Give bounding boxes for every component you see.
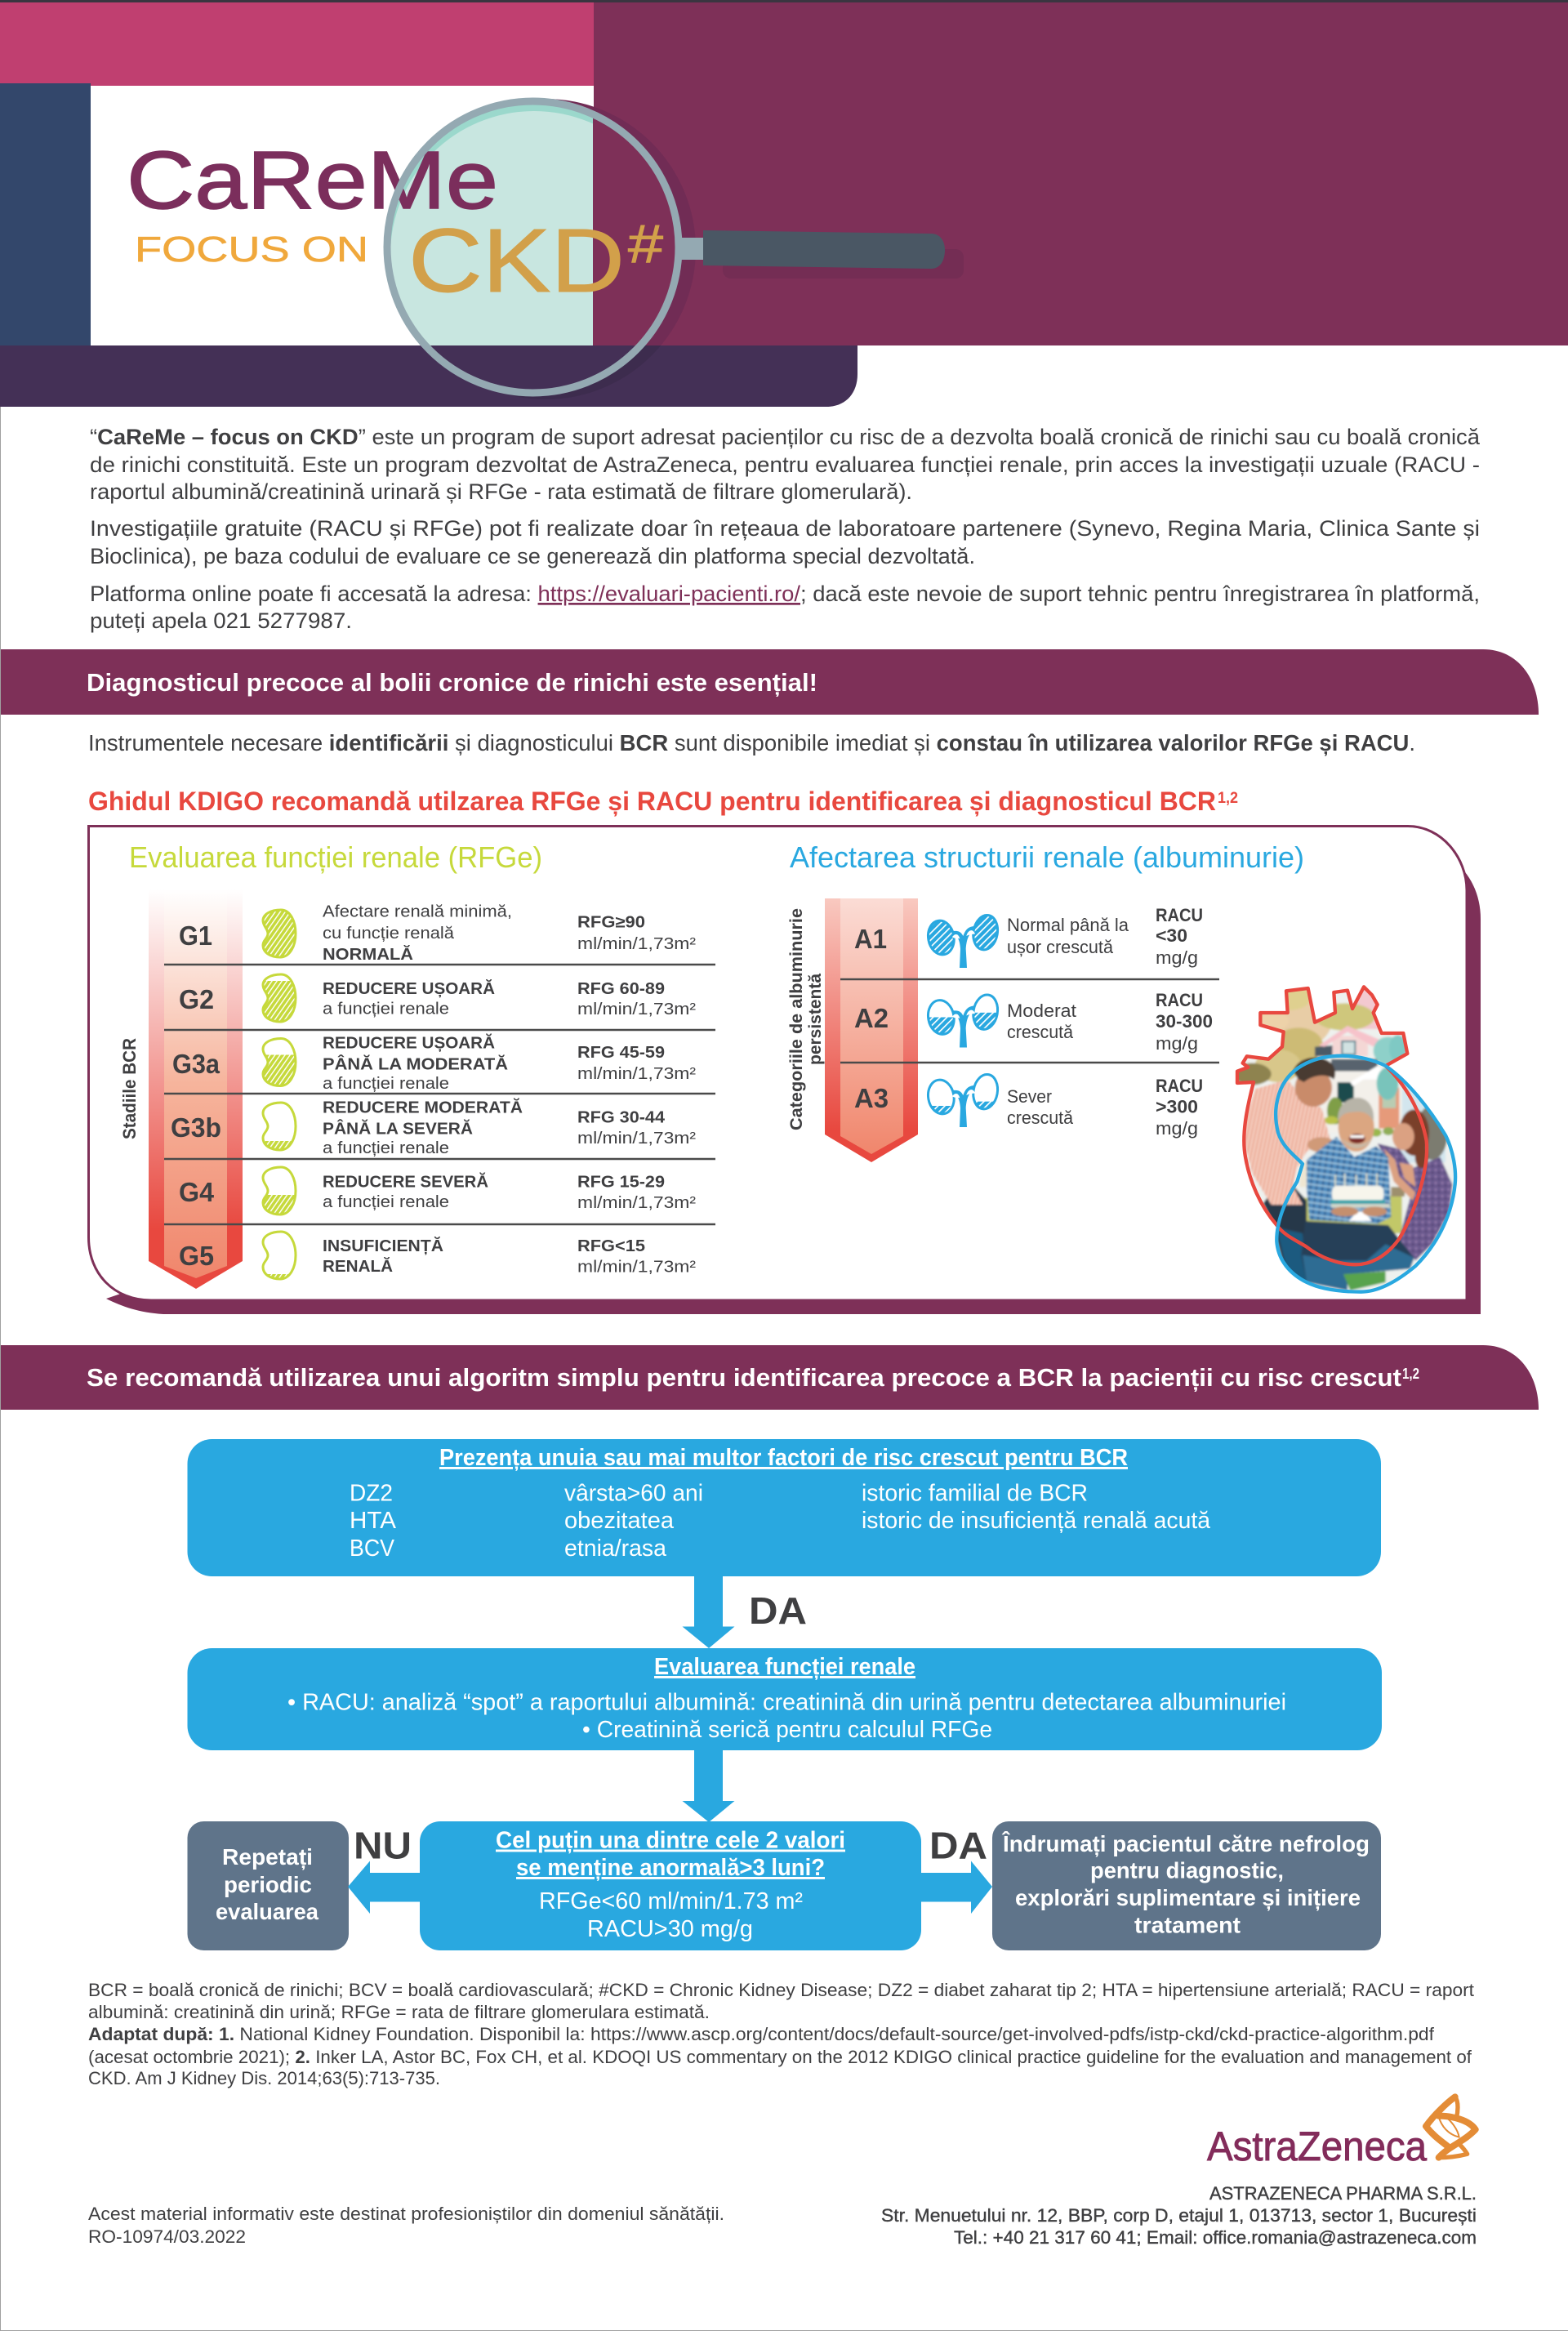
row: G2: a funcției renale xyxy=(323,1000,449,1018)
row: G1: NORMALĂ xyxy=(323,945,413,964)
heading: renal function: Evaluarea funcției renale (RFGe) xyxy=(129,840,542,874)
flow box: risk factors: vârsta>60 ani xyxy=(564,1480,703,1506)
label: NU: NU xyxy=(354,1825,412,1867)
section bar: early diagnosis xyxy=(0,649,1539,715)
row: G4: a funcției renale xyxy=(323,1193,449,1211)
flow box: risk factors: BCV xyxy=(350,1535,395,1562)
intro text block xyxy=(90,425,1481,633)
arrow: to repeat evaluation xyxy=(348,1861,425,1914)
row: G5 xyxy=(179,1232,696,1279)
flow box: persistence check: RFGe<60 ml/min/1.73 m² xyxy=(539,1888,803,1914)
flow box: renal evaluation: • Creatinină serică pentru calculul RFGe xyxy=(582,1717,992,1743)
flow box: persistence check: Cel puțin una dintre cele 2 valori xyxy=(496,1828,845,1854)
label: DA: DA xyxy=(749,1589,807,1632)
flow box: risk factors: obezitatea xyxy=(564,1508,675,1534)
intro text block: puteți apela 021 5277987. xyxy=(90,608,352,633)
row: G3a: a funcției renale xyxy=(323,1075,449,1093)
row: A1: Normal până la xyxy=(1007,915,1129,935)
title: CKD: CKD xyxy=(408,211,625,311)
flow box: persistence check: se menține anormală>3 luni? xyxy=(516,1855,825,1881)
axis label: albuminuria categories: persistentă xyxy=(806,974,825,1065)
footnotes xyxy=(88,1980,1474,2088)
heading: renal structure: Afectarea structurii renale (albuminurie) xyxy=(790,840,1304,874)
company address xyxy=(881,2183,1477,2248)
row: A1: <30 xyxy=(1156,925,1187,946)
flow box: risk factors: HTA xyxy=(350,1508,397,1534)
row: G1: cu funcție renală xyxy=(323,925,455,943)
row: G5: G5 xyxy=(179,1241,214,1271)
axis label: albuminuria categories xyxy=(787,908,825,1130)
row: G1 xyxy=(179,903,696,964)
arrow: G stages xyxy=(149,889,243,1289)
flow box: risk factors: Prezența unuia sau mai multor factori de risc crescut pentru BCR xyxy=(439,1445,1128,1471)
illustration: family in heart and kidney outlines xyxy=(1235,985,1457,1294)
row: G3b: G3b xyxy=(171,1112,221,1143)
row: G1: RFG≥90 xyxy=(577,913,645,931)
flow box: risk factors: DZ2 xyxy=(350,1480,393,1506)
arrow: to nephrologist xyxy=(916,1861,992,1914)
row: A1: mg/g xyxy=(1156,947,1198,968)
footnotes: Adaptat după: 1. National Kidney Foundation. Disponibil la: https://www.ascp.org/content/docs/default-source/get-involved-pdfs/istp-ckd/ckd-practice-algorithm.pdf xyxy=(88,2024,1435,2044)
row: A2 xyxy=(854,990,1213,1054)
table: G stages rows xyxy=(164,903,715,1279)
red heading: KDIGO guideline: 1,2 xyxy=(1218,790,1238,807)
footnotes: (acesat octombrie 2021); 2. Inker LA, Astor BC, Fox CH, et al. KDOQI US commentary on the 2012 KDIGO clinical practice guideline for the evaluation and management of xyxy=(88,2047,1472,2067)
table: A categories rows xyxy=(840,905,1219,1139)
row: A3: crescută xyxy=(1007,1108,1074,1128)
row: A3 xyxy=(854,1072,1203,1139)
row: A1: RACU xyxy=(1156,905,1203,925)
row: A2: Moderat xyxy=(1007,1001,1076,1021)
row: G3b: ml/min/1,73m² xyxy=(577,1130,696,1148)
audience note: RO-10974/03.2022 xyxy=(88,2226,246,2247)
arrow: A categories xyxy=(825,898,918,1162)
row: G2: G2 xyxy=(179,984,214,1014)
row: G3b: RFG 30-44 xyxy=(577,1109,666,1127)
flow box: persistence check xyxy=(420,1821,921,1950)
row: A2: crescută xyxy=(1007,1022,1074,1042)
flow box: repeat evaluation xyxy=(188,1821,349,1950)
row: G4: RFG 15-29 xyxy=(577,1173,665,1191)
flow box: repeat evaluation: Repetați xyxy=(222,1844,313,1870)
title: hash mark: # xyxy=(628,213,663,274)
title: FOCUS ON: FOCUS ON xyxy=(135,230,368,270)
flow box: risk factors xyxy=(188,1439,1381,1576)
flow box: repeat evaluation: evaluarea xyxy=(216,1899,318,1924)
row: G3a: REDUCERE UȘOARĂ xyxy=(323,1034,495,1052)
magnifier handle xyxy=(679,230,945,269)
intro text block: Investigațiile gratuite (RACU și RFGe) pot fi realizate doar în rețeaua de laboratoare partenere (Synevo, Regina Maria, Clinica Sante și xyxy=(90,516,1480,541)
flow box: nephrologist referral: explorări suplimentare și inițiere xyxy=(1015,1885,1361,1910)
section bar: algorithm: Se recomandă utilizarea unui algoritm simplu pentru identificarea precoce a BCR la pacienții cu risc crescut xyxy=(87,1363,1401,1392)
flow box: risk factors: istoric familial de BCR xyxy=(862,1480,1088,1506)
footnotes: albumină: creatinină din urină; RFGe = rata de filtrare glomerulara estimată. xyxy=(88,2002,710,2022)
intro text block: Bioclinica), pe baza codului de evaluare ce se generează din platforma special dezvoltată. xyxy=(90,544,975,568)
row: G3a: G3a xyxy=(172,1049,220,1079)
flow box: renal evaluation: • RACU: analiză “spot” a raportului albumină: creatinină din urină pentru detectarea albuminuriei xyxy=(287,1689,1286,1715)
flow box: nephrologist referral xyxy=(992,1821,1381,1950)
axis label: CKD stages: Stadiile BCR xyxy=(119,1038,140,1139)
flow box: nephrologist referral: tratament xyxy=(1134,1913,1241,1937)
row: G2: RFG 60-89 xyxy=(577,980,665,998)
flow box: nephrologist referral: Îndrumați pacientul către nefrolog xyxy=(1001,1831,1370,1856)
flow box: nephrologist referral: pentru diagnostic, xyxy=(1090,1857,1284,1883)
company address: Tel.: +40 21 317 60 41; Email: office.romania@astrazeneca.com xyxy=(954,2227,1477,2248)
panel: KDIGO tables xyxy=(88,827,1481,1314)
row: G4: REDUCERE SEVERĂ xyxy=(323,1173,488,1191)
banner: blue side block xyxy=(0,83,91,345)
row: G3a: RFG 45-59 xyxy=(577,1044,665,1062)
row: G4: ml/min/1,73m² xyxy=(577,1194,696,1212)
intro text block: “CaReMe – focus on CKD” este un program de suport adresat pacienților cu risc de a dezvolta boală cronică de rinichi sau cu boală cronică xyxy=(90,425,1481,449)
footnotes: BCR = boală cronică de rinichi; BCV = boală cardiovasculară; #CKD = Chronic Kidney Disease; DZ2 = diabet zaharat tip 2; HTA = hipertensiune arterială; RACU = raport xyxy=(88,1980,1474,2000)
logo symbol xyxy=(1426,2097,1476,2158)
row: G2: ml/min/1,73m² xyxy=(577,1001,696,1018)
row: G5: ml/min/1,73m² xyxy=(577,1258,696,1276)
row: G3a xyxy=(172,1034,696,1093)
intro text block: de rinichi constituită. Este un program dezvoltat de AstraZeneca, pentru evaluarea funcției renale, prin acces la investigații uzuale (RACU - xyxy=(90,452,1480,477)
outline: heart xyxy=(1237,987,1427,1264)
arrow: to persistence check xyxy=(683,1750,735,1822)
company address: Str. Menuetului nr. 12, BBP, corp D, etajul 1, 013713, sector 1, București xyxy=(881,2205,1477,2226)
row: G5: RFG<15 xyxy=(577,1237,645,1255)
intro text block: raportul albumină/creatinină urinară și RFGe - rata estimată de filtrare glomerulară). xyxy=(90,479,912,504)
row: A3: >300 xyxy=(1156,1096,1198,1117)
row: G5: RENALĂ xyxy=(323,1257,393,1276)
row: G4: G4 xyxy=(179,1177,215,1207)
section bar: algorithm: 1,2 xyxy=(1402,1366,1419,1382)
intro text block: Platforma online poate fi accesată la adresa: https://evaluari-pacienti.ro/; dacă este nevoie de suport tehnic pentru înregistrarea în platformă, xyxy=(90,582,1480,606)
section bar: algorithm xyxy=(0,1345,1539,1410)
row: A2: mg/g xyxy=(1156,1033,1198,1054)
row: G3a: ml/min/1,73m² xyxy=(577,1065,696,1083)
company address: ASTRAZENECA PHARMA S.R.L. xyxy=(1209,2183,1477,2204)
row: G1: Afectare renală minimă, xyxy=(323,903,512,921)
row: A1: A1 xyxy=(854,924,887,954)
row: G4 xyxy=(179,1167,696,1215)
flow box: repeat evaluation: periodic xyxy=(224,1872,312,1897)
banner: plum background xyxy=(594,2,1568,345)
row: G3a: PÂNĂ LA MODERATĂ xyxy=(323,1054,508,1073)
title: CaReMe: CaReMe xyxy=(127,135,498,226)
audience note: Acest material informativ este destinat profesioniștilor din domeniul sănătății. xyxy=(88,2204,724,2224)
flow box: risk factors: istoric de insuficiență renală acută xyxy=(862,1508,1211,1534)
banner: dark lower band xyxy=(0,345,858,407)
row: G2 xyxy=(179,974,696,1022)
logo: AstraZeneca: AstraZeneca xyxy=(1207,2124,1427,2169)
section bar: early diagnosis: Diagnosticul precoce al bolii cronice de rinichi este esențial! xyxy=(87,668,817,697)
outline: kidney xyxy=(1276,1056,1455,1292)
row: G1: G1 xyxy=(179,920,212,951)
red heading: KDIGO guideline: Ghidul KDIGO recomandă utilzarea RFGe și RACU pentru identificarea și diagnosticul BCR xyxy=(88,787,1216,816)
row: A3: Sever xyxy=(1007,1086,1052,1107)
header banner xyxy=(0,0,1568,407)
row: A3: A3 xyxy=(854,1083,889,1113)
label: DA: DA xyxy=(929,1825,987,1867)
row: G3b xyxy=(171,1098,696,1157)
row: G3b: PÂNĂ LA SEVERĂ xyxy=(323,1119,473,1139)
flow box: renal evaluation xyxy=(188,1648,1382,1750)
statement: tools available: Instrumentele necesare identificării și diagnosticului BCR sunt disponibile imediat și constau în utilizarea valorilor RFGe și RACU. xyxy=(88,730,1415,755)
row: A2: A2 xyxy=(854,1003,889,1033)
banner: white title panel xyxy=(91,86,593,345)
logo: AstraZeneca xyxy=(1207,2097,1476,2169)
flow box: renal evaluation: Evaluarea funcției renale xyxy=(654,1654,915,1680)
row: A2: 30-300 xyxy=(1156,1011,1213,1032)
magnifier shadow xyxy=(387,99,964,399)
row: G2: REDUCERE UȘOARĂ xyxy=(323,979,495,998)
row: A2: RACU xyxy=(1156,990,1203,1010)
audience note xyxy=(88,2204,724,2247)
row: G5: INSUFICIENȚĂ xyxy=(323,1237,443,1255)
footnotes: CKD. Am J Kidney Dis. 2014;63(5):713-735. xyxy=(88,2068,440,2088)
magnifier ring xyxy=(387,101,679,393)
flow box: persistence check: RACU>30 mg/g xyxy=(587,1916,753,1942)
arrow: to renal evaluation xyxy=(683,1576,735,1648)
row: A3: RACU xyxy=(1156,1076,1203,1096)
flow box: risk factors: etnia/rasa xyxy=(564,1535,667,1562)
row: A1: ușor crescută xyxy=(1007,937,1114,957)
banner: pink block xyxy=(0,2,594,86)
axis label: albuminuria categories: Categoriile de albuminurie xyxy=(787,908,806,1130)
row: G3b: a funcției renale xyxy=(323,1139,449,1157)
row: G3b: REDUCERE MODERATĂ xyxy=(323,1098,523,1117)
row: A1 xyxy=(854,905,1203,968)
row: G1: ml/min/1,73m² xyxy=(577,935,696,953)
row: A3: mg/g xyxy=(1156,1118,1198,1139)
magnifier lens xyxy=(390,105,593,345)
